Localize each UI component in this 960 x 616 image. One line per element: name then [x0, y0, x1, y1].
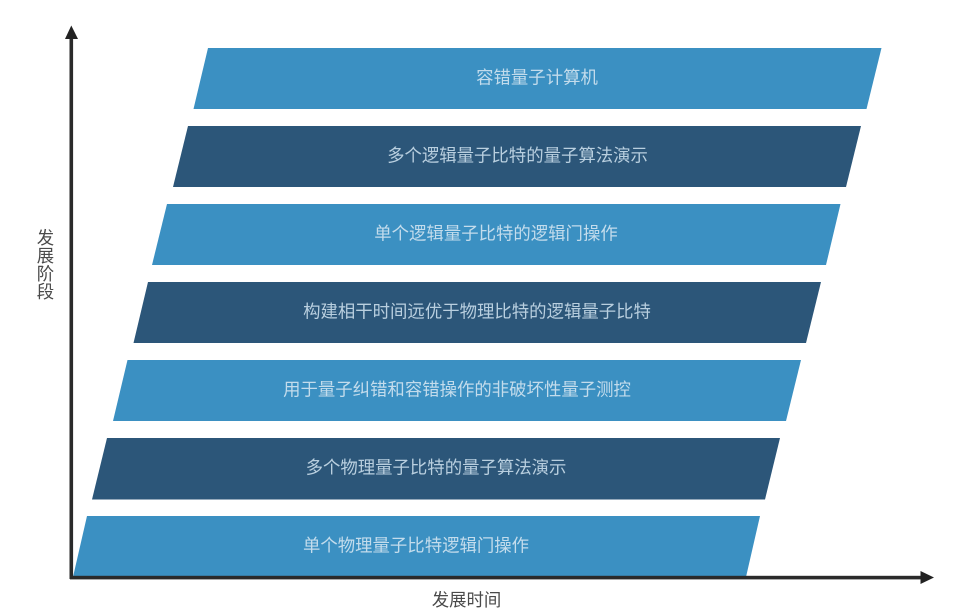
arrow: horizontal axis [70, 571, 934, 584]
stage 5: single logical qubit gate [152, 204, 840, 265]
stage 5: single logical qubit gate: 单个逻辑量子比特的逻辑门操作 [374, 224, 618, 244]
stage 7: fault-tolerant quantum computer [194, 48, 882, 109]
stage 2: multi physical qubit algorithm demo [92, 438, 780, 500]
stage 4: building logical qubits: 构建相干时间远优于物理比特的逻辑量子比特 [303, 302, 651, 322]
y axis label: 展 [37, 246, 54, 266]
arrow: vertical axis [65, 26, 78, 579]
stage 1: single physical qubit gate [73, 516, 760, 577]
y axis label: 阶 [37, 264, 54, 284]
y axis label: 段 [37, 282, 54, 302]
stage 1: single physical qubit gate: 单个物理量子比特逻辑门操作 [303, 536, 529, 556]
stage 2: multi physical qubit algorithm demo: 多个物理量子比特的量子算法演示 [306, 458, 566, 478]
stage 3: non-destructive measurement: 用于量子纠错和容错操作的非破坏性量子测控 [283, 380, 631, 400]
stage 6: multi logical qubit algorithm demo [173, 126, 861, 187]
stage 6: multi logical qubit algorithm demo: 多个逻辑量子比特的量子算法演示 [387, 146, 648, 166]
stage 7: fault-tolerant quantum computer: 容错量子计算机 [476, 68, 598, 88]
y axis label: 发 [37, 228, 54, 248]
y axis label [37, 228, 54, 302]
stage 3: non-destructive measurement [113, 360, 801, 421]
stage 4: building logical qubits [134, 282, 821, 343]
x axis label: 发展时间 [432, 590, 501, 610]
